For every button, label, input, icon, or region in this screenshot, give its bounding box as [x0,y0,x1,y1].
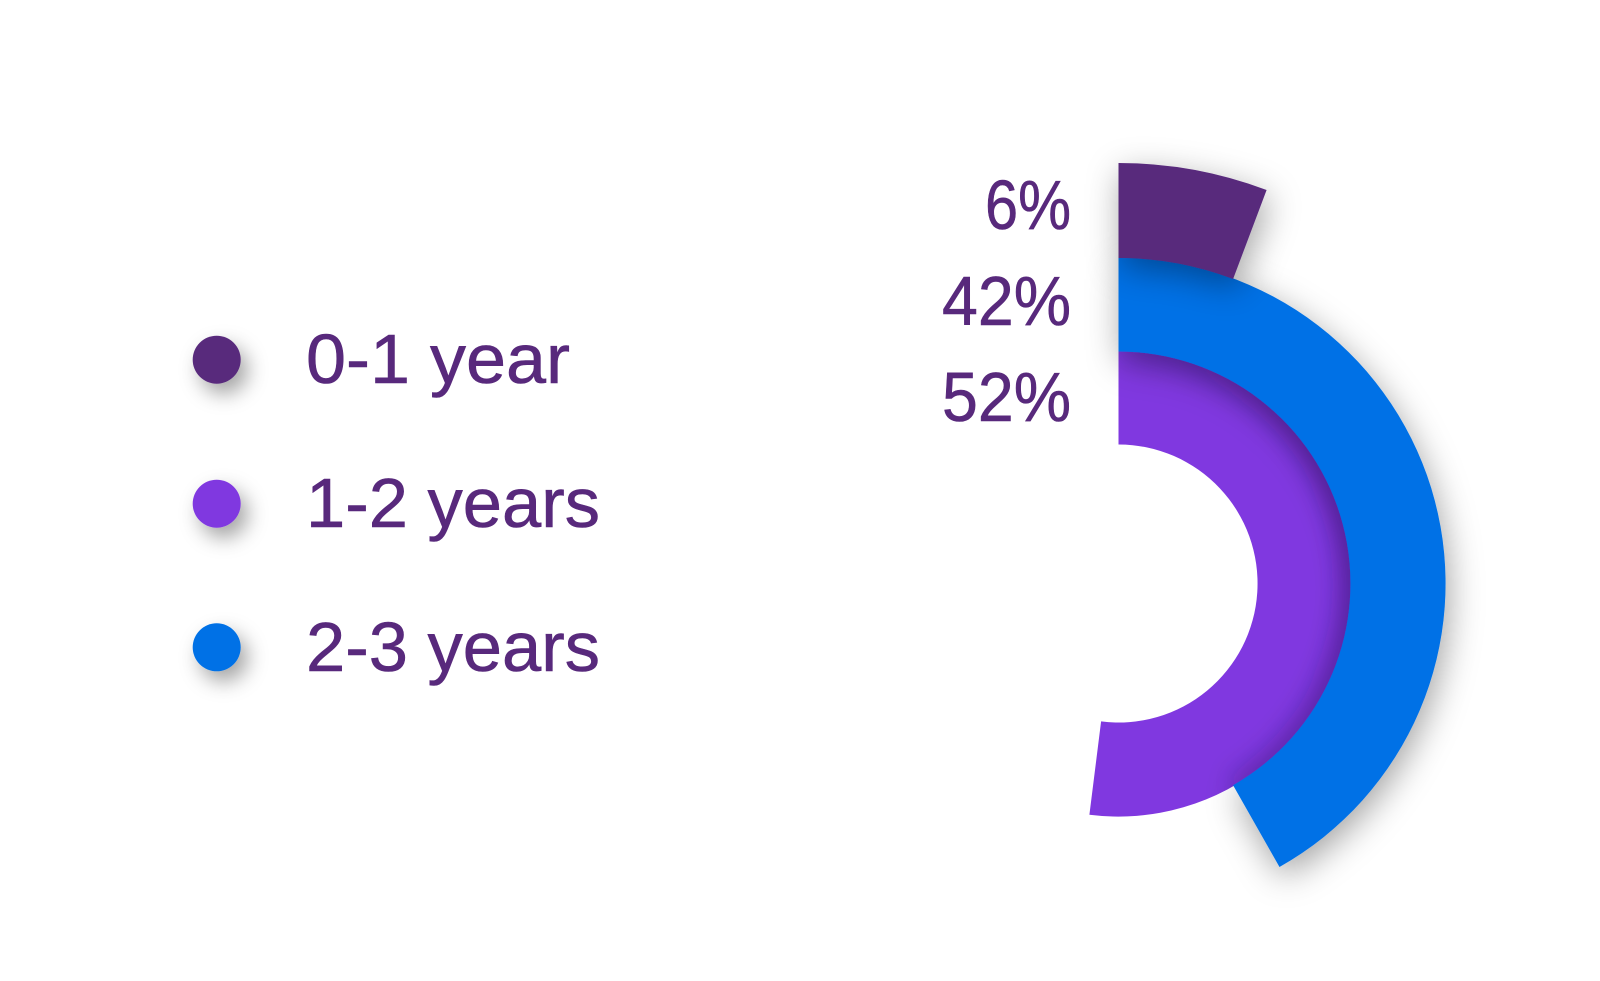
arc: 2-3 years 42% [1118,258,1446,867]
percentage labels [942,166,1071,436]
label: 6%: 6% [985,166,1071,244]
arc: 0-1 year 6% [1118,163,1267,279]
legend item: 0-1 year [193,320,570,398]
legend item: 0-1 year: 0-1 year [306,320,570,398]
arc: 1-2 years 52% [1089,351,1351,817]
legend item: 1-2 years: 1-2 years [306,464,600,542]
label: 52%: 52% [942,358,1071,436]
label: 42%: 42% [942,262,1071,340]
legend [193,320,600,686]
legend item: 2-3 years: 2-3 years [306,608,600,686]
radial bar chart [1089,163,1446,867]
